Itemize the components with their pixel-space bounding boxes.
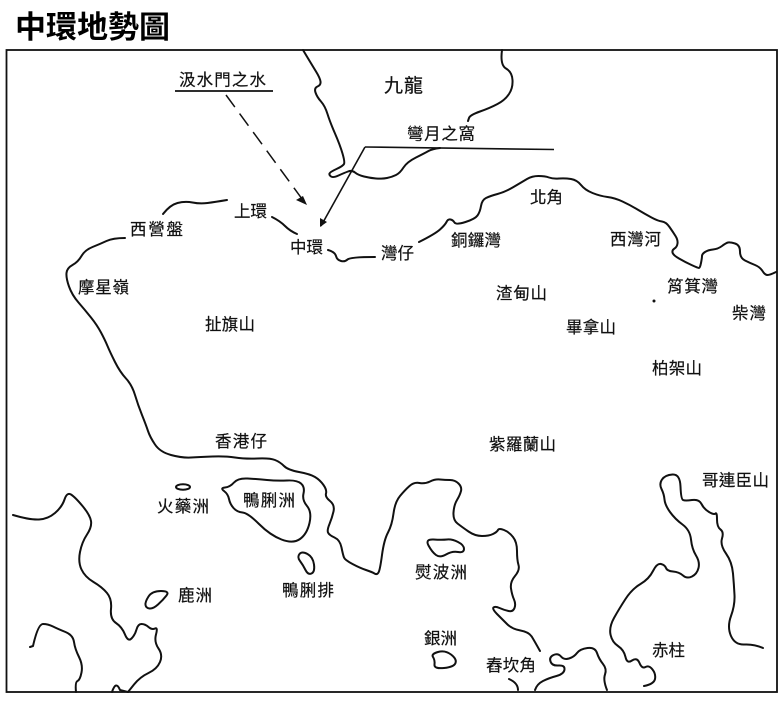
coastline: west and south shore <box>66 238 540 651</box>
place labels <box>78 75 769 675</box>
label: Mount Butler: 畢拿山 <box>566 317 616 337</box>
label: Ap Lei Chau: 鴨脷洲 <box>243 491 295 510</box>
label: Chung Hom Kok: 舂坎角 <box>486 656 536 675</box>
callout: Kap Shui Mun water <box>175 70 307 205</box>
label: Sai Wan Ho: 西灣河 <box>610 230 661 249</box>
coastline: Kowloon west <box>303 50 440 179</box>
island: Magazine Island <box>176 484 190 490</box>
label: Wan Chai: 灣仔 <box>381 244 414 263</box>
coastline: lower left <box>30 624 82 692</box>
label: Ap Lei Pai: 鴨脷排 <box>282 581 334 600</box>
label: Sai Ying Pun: 西營盤 <box>130 220 183 239</box>
coastline: Chung Hom Kok <box>509 679 518 690</box>
label: Stanley: 赤柱 <box>652 641 685 660</box>
label: North Point: 北角 <box>530 188 563 207</box>
label: Central: 中環 <box>290 238 323 257</box>
label: Violet Hill: 紫羅蘭山 <box>489 435 556 454</box>
label: Ngan Chau: 銀洲 <box>424 629 457 648</box>
island: Ap Lei Pai <box>298 552 314 574</box>
coastline: Stanley to Shek O <box>610 474 763 686</box>
coastline: Central to Wan Chai <box>328 250 375 261</box>
title: 中環地勢圖 <box>15 10 170 45</box>
coastline: small headland <box>112 685 128 692</box>
label: Magazine Island: 火藥洲 <box>157 497 209 516</box>
label: Middle Island: 熨波洲 <box>415 562 467 582</box>
island: Ap Lei Chau <box>222 478 310 542</box>
label: Victoria Peak: 扯旗山 <box>205 315 255 334</box>
label: Mount Collinson: 哥連臣山 <box>702 471 769 490</box>
coastline: southwest headland <box>13 494 161 692</box>
label: Sheung Wan: 上環 <box>234 202 267 221</box>
island: Ngan Chau <box>433 651 456 668</box>
arrow: solid <box>320 147 365 227</box>
label: Shau Kei Wan: 筲箕灣 <box>667 277 718 296</box>
coastline: Kowloon east <box>468 50 513 121</box>
label: Causeway Bay: 銅鑼灣 <box>451 231 501 250</box>
island: Middle Island <box>427 539 464 556</box>
label: Jardine's Lookout: 渣甸山 <box>496 284 547 303</box>
island: Luk Chau <box>145 591 167 609</box>
islands <box>145 478 464 668</box>
specks <box>652 300 656 302</box>
callout: Crescent Bay <box>320 124 554 227</box>
label: Mount Parker: 柏架山 <box>652 359 702 378</box>
callout: Kap Shui Mun water: 汲水門之水 <box>179 70 266 90</box>
label: Luk Chau: 鹿洲 <box>178 586 212 605</box>
label: Chai Wan: 柴灣 <box>732 304 766 323</box>
coastline: Sheung Wan to Central <box>272 217 297 234</box>
label: Kowloon: 九龍 <box>384 75 423 97</box>
coastline: north shore east <box>419 176 776 275</box>
label: Aberdeen: 香港仔 <box>215 432 267 451</box>
coastline: south peninsula <box>535 648 607 690</box>
arrow: dashed <box>226 95 307 205</box>
label: Mount Davis: 摩星嶺 <box>78 278 129 297</box>
callout: Crescent Bay: 彎月之窩 <box>407 124 475 144</box>
coastline: Sai Ying Pun to Sheung Wan <box>163 200 227 214</box>
